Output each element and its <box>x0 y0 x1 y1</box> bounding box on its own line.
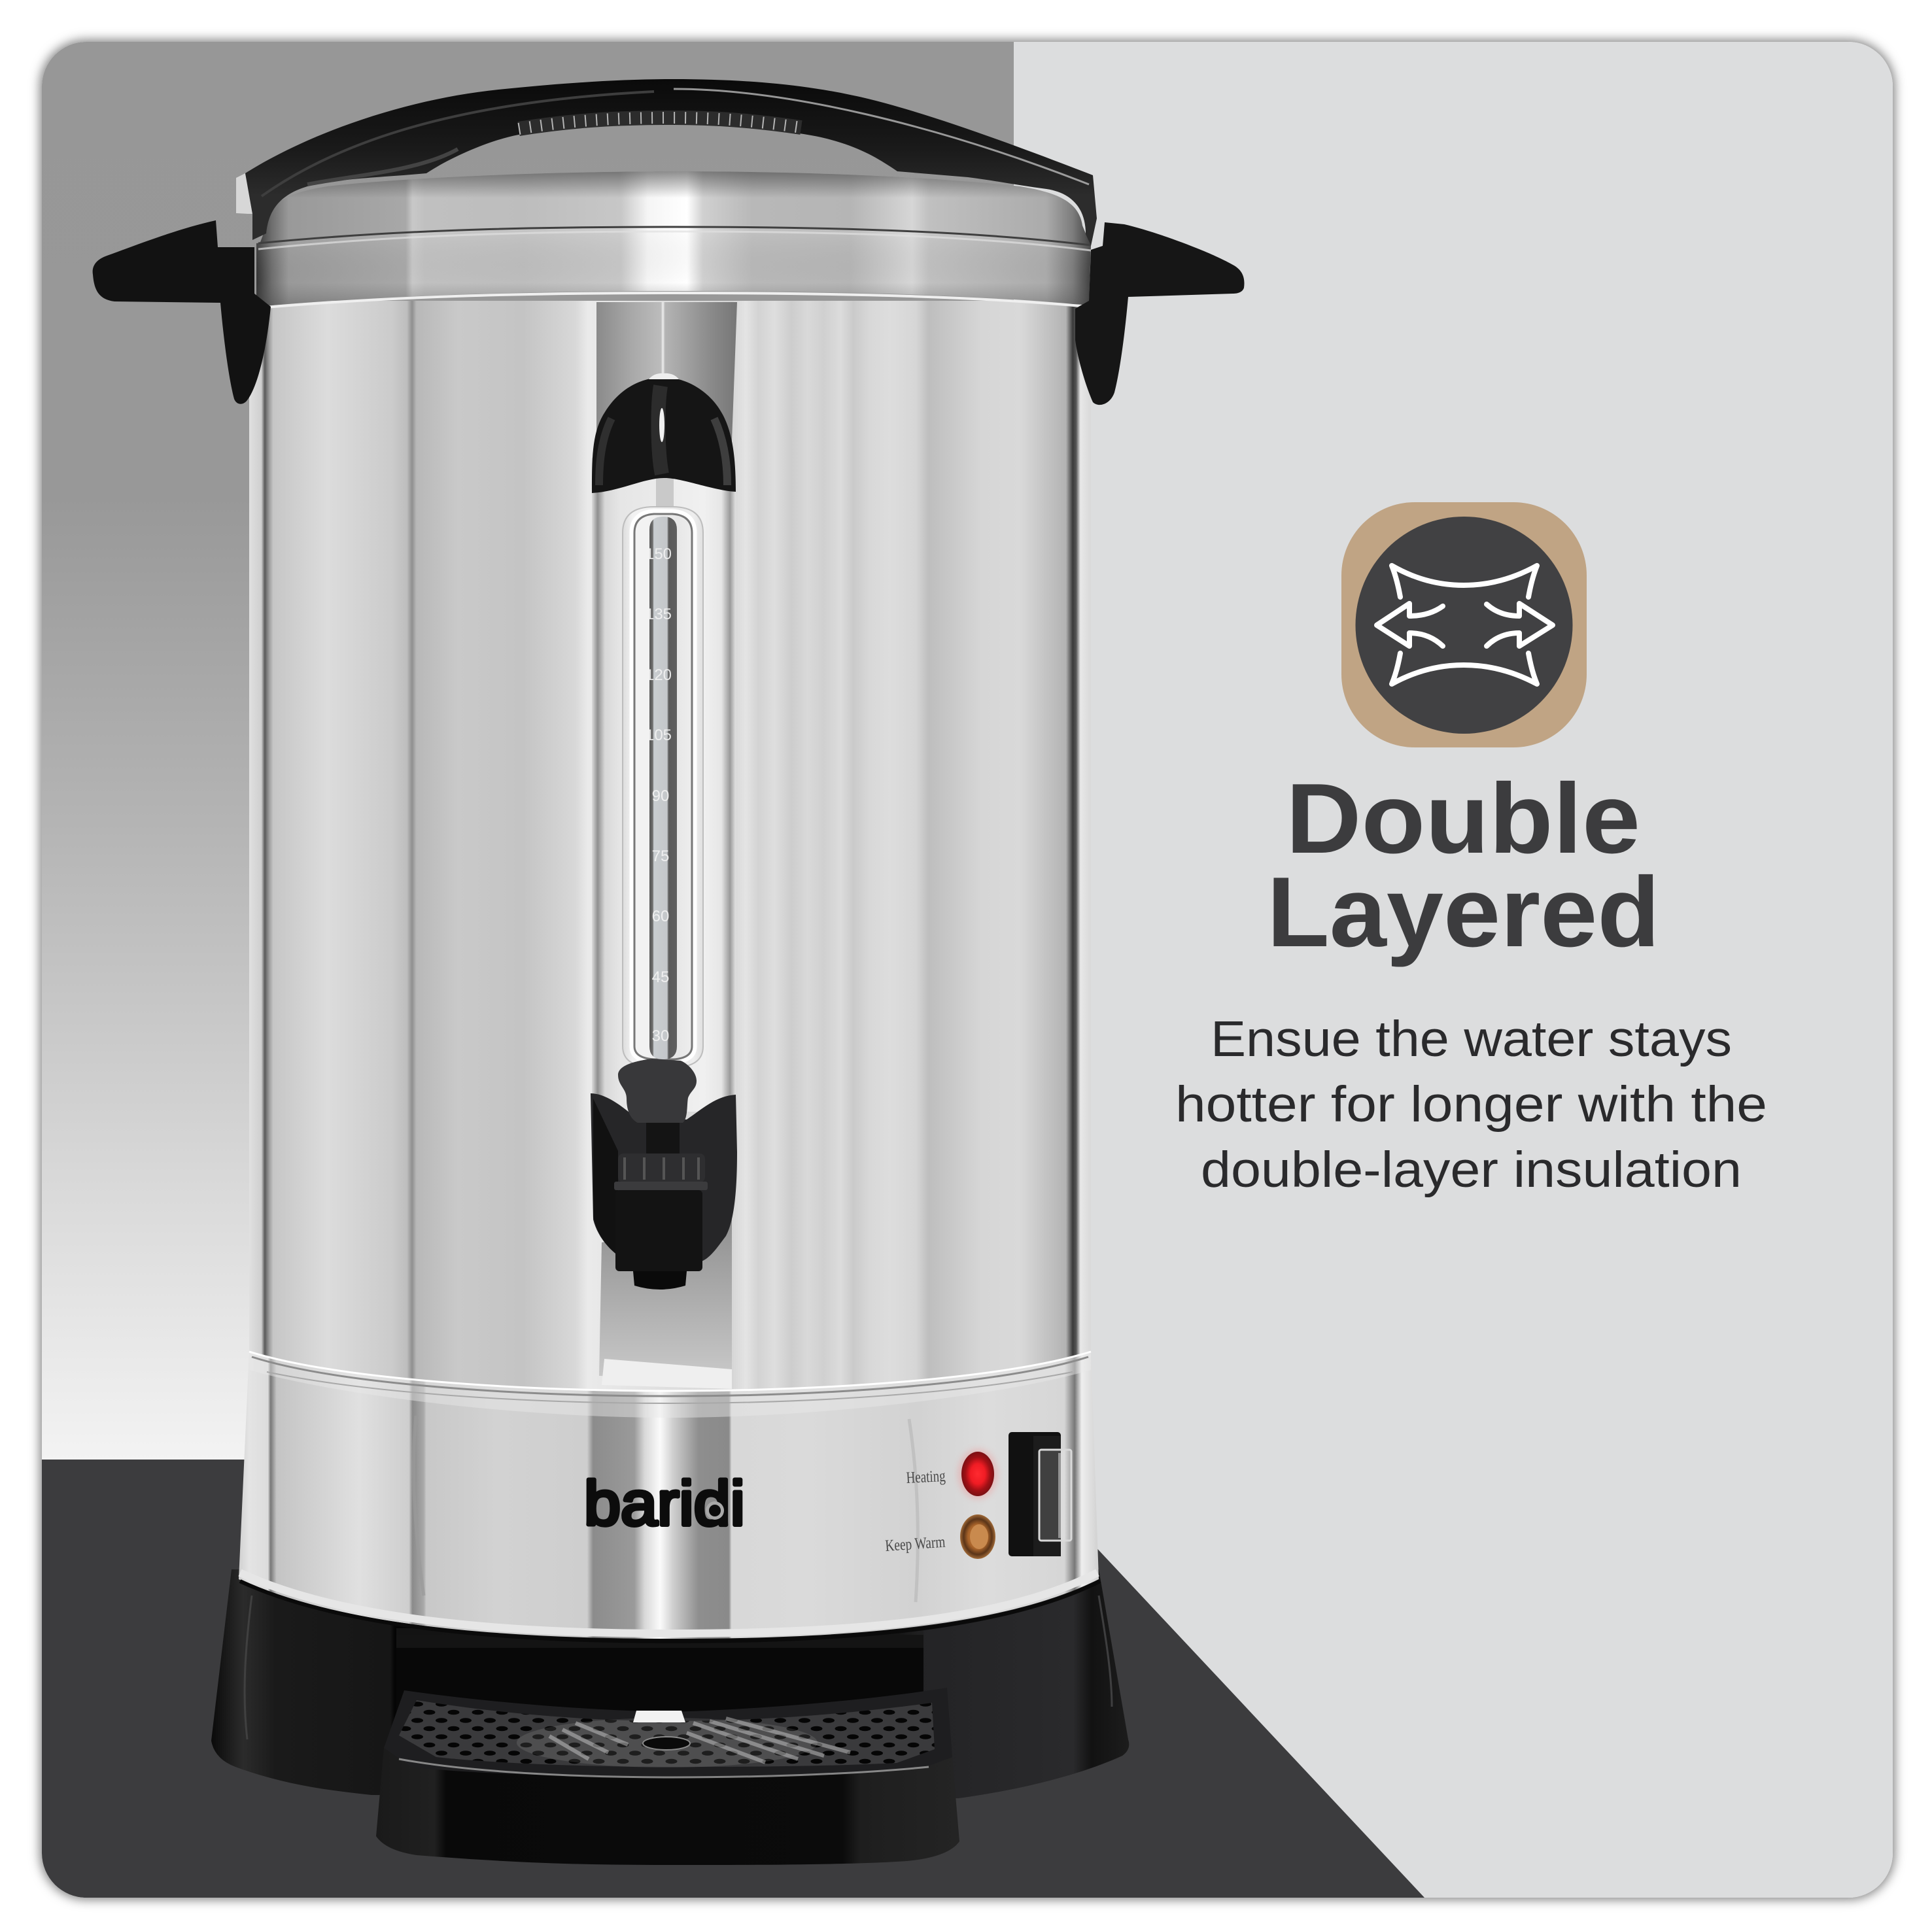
gauge scale numbers: 135 <box>646 606 672 623</box>
power switch <box>1009 1432 1071 1556</box>
gauge scale numbers: 60 <box>652 908 669 925</box>
tap cradle <box>591 1093 737 1262</box>
tap lever head <box>618 1059 697 1123</box>
gauge scale numbers: 105 <box>646 726 672 744</box>
heading: Double Layered: Layered <box>1267 857 1660 968</box>
body text: double-layer insulation <box>1201 1142 1742 1198</box>
gauge scale numbers: 30 <box>652 1027 669 1045</box>
lower control band <box>239 1352 1100 1641</box>
grate gloss highlight <box>517 1711 850 1768</box>
gauge neck <box>656 476 674 513</box>
tap body <box>615 1190 702 1271</box>
panel: light grey right background <box>1014 42 1893 1898</box>
reflection above spout hood <box>596 302 737 458</box>
tap ridged nut <box>618 1153 705 1182</box>
body text <box>1175 1011 1767 1198</box>
gauge scale numbers: 90 <box>652 787 669 805</box>
silver reflection behind gauge <box>592 458 736 1112</box>
drip tray <box>376 1688 959 1865</box>
tan squircle <box>1341 502 1587 747</box>
label: Heating: Heating <box>906 1467 946 1487</box>
gauge scale numbers: 150 <box>646 545 672 563</box>
left side handle <box>93 220 271 404</box>
indicator: red heating light <box>958 1449 997 1499</box>
heading: Double Layered <box>1267 763 1660 968</box>
dark circle <box>1355 517 1572 734</box>
body text: hotter for longer with the <box>1175 1076 1767 1133</box>
heading: Double Layered: Double <box>1286 763 1640 874</box>
tap flange <box>614 1182 708 1190</box>
water level gauge <box>623 476 703 1067</box>
tray top <box>384 1688 952 1777</box>
indicator: amber keep warm light <box>960 1514 995 1559</box>
silver handle hinge highlight <box>236 173 252 214</box>
badge icon: double layer expansion <box>1341 502 1587 747</box>
panel: dark floor <box>42 1460 1424 1898</box>
gauge scale numbers: 75 <box>652 847 669 865</box>
body text: Ensue the water stays <box>1211 1011 1732 1067</box>
tray lip highlight <box>399 1759 929 1777</box>
gauge scale numbers: 45 <box>652 968 669 986</box>
label: Keep Warm: Keep Warm <box>885 1533 946 1555</box>
tap nozzle <box>633 1271 687 1290</box>
drain hole <box>643 1737 690 1750</box>
urn base <box>211 1569 1129 1798</box>
product: stainless steel water boiler urn <box>93 79 1244 1865</box>
glass tube <box>623 507 703 1067</box>
perforated grate <box>399 1700 935 1767</box>
logo: baridi: baridi <box>584 1469 745 1539</box>
tap assembly <box>591 1059 737 1290</box>
logo ring in letter d <box>706 1501 724 1520</box>
ridged handle grip <box>519 118 801 129</box>
gauge scale numbers <box>646 545 672 1045</box>
reflection below tap <box>599 1216 732 1378</box>
spout hood <box>592 373 736 493</box>
tray front wall <box>376 1748 959 1865</box>
gauge scale numbers: 120 <box>646 666 672 684</box>
lid and upper band <box>256 171 1091 308</box>
tap stem <box>646 1123 680 1155</box>
white arrow glyph <box>1377 566 1553 684</box>
lid dome <box>258 171 1091 247</box>
top carry handle <box>245 79 1097 246</box>
panel: grey gradient wall <box>42 42 1014 1461</box>
right side handle <box>1075 222 1244 405</box>
urn main body <box>249 301 1091 1391</box>
upper band <box>256 227 1091 307</box>
